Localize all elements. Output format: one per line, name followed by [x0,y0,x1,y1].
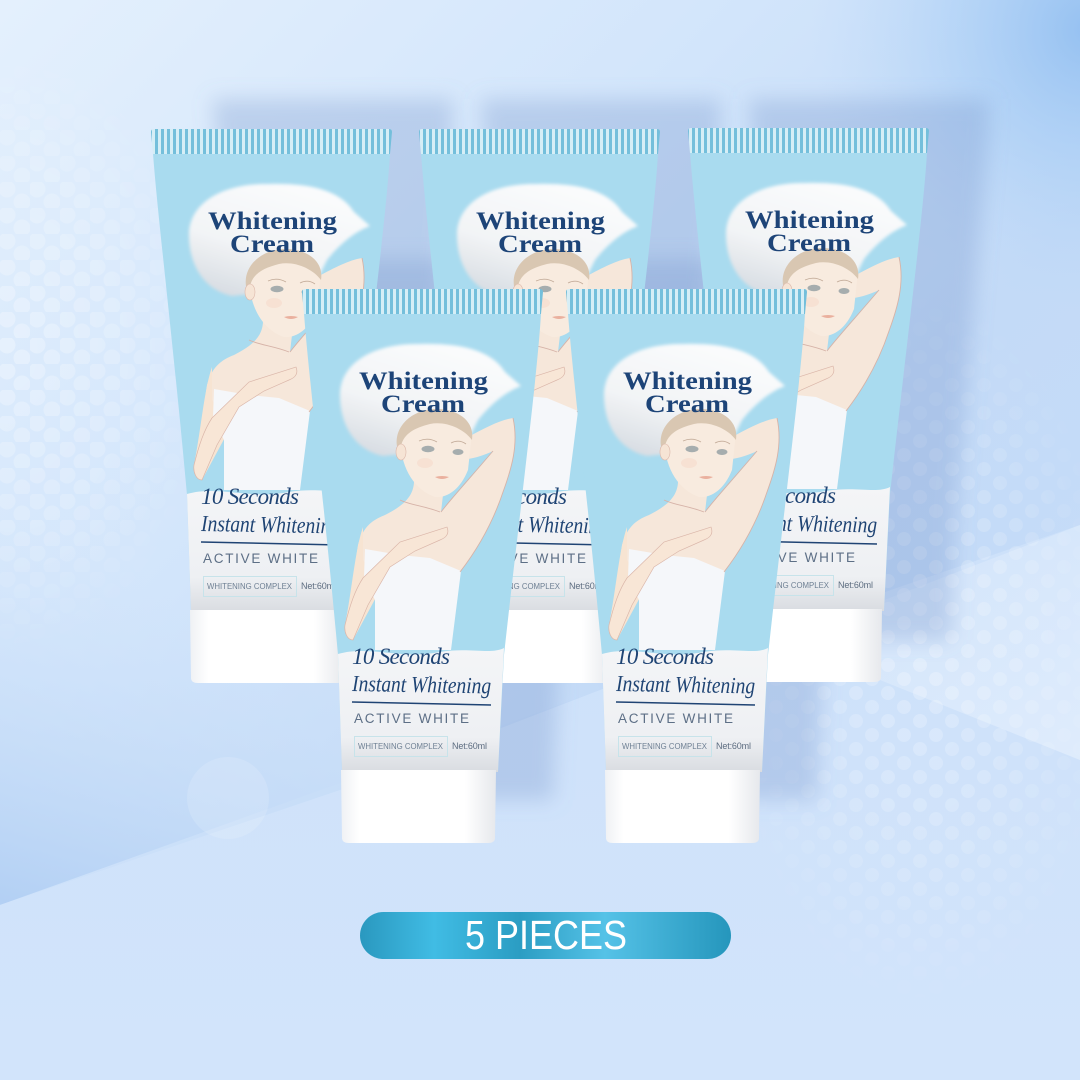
tube: back left: Net:60ml [301,581,336,591]
product name: Whitening [359,366,488,395]
tube: back right: Net:60ml [838,580,873,590]
tube: back middle: 10 Seconds [469,484,567,509]
tube: back right: Instant Whitening [737,510,877,537]
tube: front right [566,289,807,843]
quantity pill [360,912,731,959]
tube: back middle: ACTIVE WHITE [471,551,586,566]
net volume: Net:60ml [716,741,751,751]
tube: back right: 10 Seconds [738,483,836,508]
tube: back middle: Whitening [476,206,605,235]
tube: back right: ACTIVE WHITE [740,550,855,565]
product name: Whitening [623,366,752,395]
tube: back left: WHITENING COMPLEX [207,582,293,591]
tube: back middle: WHITENING COMPLEX [475,582,561,591]
tagline: instant whitening: Instant Whitening [351,671,491,698]
tube: back middle: Instant Whitening [468,511,608,538]
tube: back left: Cream [230,229,314,258]
tube: back right: Whitening [745,205,874,234]
tube: back right: WHITENING COMPLEX [744,581,830,590]
tube: back middle: Net:60ml [569,581,604,591]
tube: back middle [419,129,660,683]
complex label: WHITENING COMPLEX [358,742,444,751]
tube: back middle: Cream [498,229,582,258]
tube: back right: Cream [767,228,851,257]
tagline: 10 seconds: 10 Seconds [352,644,450,669]
tube: back right [688,128,929,682]
tube: back left: ACTIVE WHITE [203,551,318,566]
product name line 2: Cream [381,389,465,418]
brand line: ACTIVE WHITE [618,711,733,726]
tagline: 10 seconds: 10 Seconds [616,644,714,669]
tube: front left [302,289,543,843]
tagline: instant whitening: Instant Whitening [615,671,755,698]
quantity label: 5 PIECES [465,912,627,958]
tube: back left [151,129,392,683]
complex label: WHITENING COMPLEX [622,742,708,751]
product name line 2: Cream [645,389,729,418]
tube shadows [212,99,989,800]
net volume: Net:60ml [452,741,487,751]
tube: back left: 10 Seconds [201,484,299,509]
brand line: ACTIVE WHITE [354,711,469,726]
tube: back left: Instant Whitening [200,511,340,538]
tube: back left: Whitening [208,206,337,235]
